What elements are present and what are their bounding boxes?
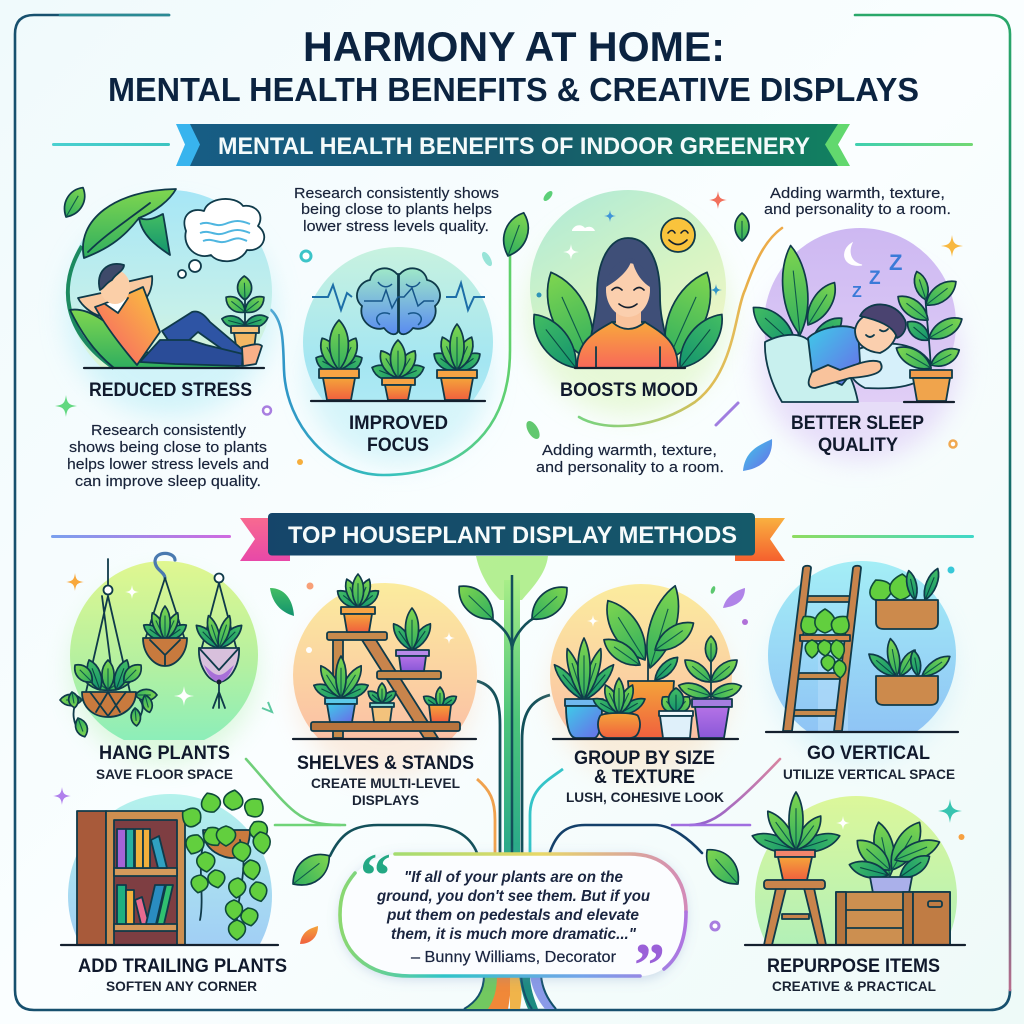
panel: add trailing plants: [60, 789, 280, 946]
text: reduced stress description: [67, 423, 269, 490]
icon: big leaf and lounger: [68, 189, 240, 368]
icon: three potted plants: [313, 320, 484, 400]
text: better sleep description: and personality to a room.: [764, 202, 951, 218]
label: group by size and texture: LUSH, COHESIVE LOOK: [566, 790, 724, 805]
icon: ladder: [783, 566, 861, 731]
label: add trailing plants: ADD TRAILING PLANTS: [78, 956, 287, 977]
label: repurpose items: REPURPOSE ITEMS: [767, 956, 940, 977]
label: group by size and texture: & TEXTURE: [594, 767, 695, 788]
icon: cloud and sparkles: [536, 191, 727, 298]
text: reduced stress description: Research consistently: [91, 423, 247, 439]
text: reduced stress description: shows being close to plants: [69, 440, 267, 456]
title: HARMONY AT HOME:: [303, 23, 725, 70]
icon: hook basket: [141, 553, 189, 666]
icon: smiley: [661, 218, 695, 252]
text: focus description: being close to plants helps: [301, 202, 492, 218]
label: repurpose items: CREATIVE & PRACTICAL: [772, 979, 936, 994]
label: better sleep quality: QUALITY: [818, 435, 898, 456]
icon: potted plant: [220, 276, 270, 358]
icon: sleeping man: [765, 304, 930, 402]
icon: stool plant: [750, 792, 842, 880]
icon: side foliage: [524, 265, 732, 376]
panel: shelves and stands: [293, 574, 477, 778]
icon: opening quote mark: “: [360, 842, 391, 910]
text: zzz: [852, 250, 902, 301]
icon: wall planters: [865, 567, 953, 705]
panel: reduced stress: [66, 189, 274, 416]
label: group by size and texture: GROUP BY SIZE: [574, 748, 715, 769]
central tree: [451, 556, 574, 862]
sparkles: [306, 632, 455, 653]
icon: hanging fern on ladder: [796, 609, 854, 678]
decorations: purple leaf and dots: [710, 586, 748, 625]
sparkles: [125, 585, 194, 706]
text: boosts mood description: Adding warmth, texture,: [542, 443, 717, 459]
label: boosts mood: BOOSTS MOOD: [560, 380, 698, 401]
text: focus description: [294, 186, 499, 235]
icon: stool: [764, 880, 826, 945]
label: shelves and stands: DISPLAYS: [352, 793, 419, 808]
icon: thought cloud: [178, 199, 264, 278]
icon: wooden crate: [836, 892, 950, 945]
panel: better sleep: [746, 228, 966, 460]
label: group by size and texture: [566, 748, 724, 805]
icon: right plant and pot: [892, 270, 966, 401]
connector: mood to sleep: [579, 228, 782, 426]
icon: crate plant: [847, 817, 943, 893]
connectors: left methods: [246, 759, 477, 894]
text: boosts mood description: [536, 443, 724, 476]
label: hang plants: SAVE FLOOR SPACE: [96, 767, 233, 782]
label: improved focus: [349, 413, 448, 456]
banner: top houseplant display methods: [51, 513, 974, 561]
text: quote body: [376, 869, 651, 943]
text: zzz: Z: [869, 268, 881, 289]
icon: large hanging basket: [60, 559, 157, 739]
label: shelves and stands: [297, 753, 474, 808]
decorations: small leaf and dot: [262, 582, 314, 712]
label: better sleep quality: BETTER SLEEP: [791, 413, 924, 434]
label: hang plants: HANG PLANTS: [99, 743, 230, 764]
icon: books: [117, 829, 173, 924]
icon: left plant: [746, 244, 847, 353]
banner: mental health benefits: [52, 124, 973, 166]
icon: smiling woman: [577, 238, 678, 368]
label: improved focus: IMPROVED: [349, 413, 448, 434]
icon: wooden stand: [311, 632, 460, 738]
panel: boosts mood: [524, 190, 732, 415]
text: reduced stress description: helps lower stress levels and: [67, 457, 269, 473]
title: MENTAL HEALTH BENEFITS & CREATIVE DISPLAYS: [108, 71, 919, 108]
label: hang plants: [96, 743, 233, 782]
text: quote body: "If all of your plants are on the: [404, 869, 623, 886]
text: quote body: put them on pedestals and elevate: [386, 907, 639, 924]
decorations: purple star and leaf: [53, 787, 318, 944]
text: focus description: lower stress levels quality.: [303, 219, 489, 235]
label: add trailing plants: [78, 956, 287, 994]
label: reduced stress: REDUCED STRESS: [89, 380, 252, 401]
text: focus description: Research consistently shows: [294, 186, 499, 202]
icon: brain: [357, 268, 440, 334]
decorative leaves and dots top: [55, 183, 772, 471]
panel: group by size and texture: [550, 582, 743, 778]
panel: go vertical: [766, 561, 958, 760]
text: boosts mood description: and personality to a room.: [536, 460, 724, 476]
icon: bookcase: [77, 811, 185, 945]
label: shelves and stands: CREATE MULTI-LEVEL: [311, 776, 460, 791]
text: quote body: them, it is much more dramatic...": [391, 926, 637, 943]
icon: grouped plants: [550, 582, 743, 738]
panel: hang plants: [60, 553, 258, 762]
text: zzz: Z: [852, 284, 862, 301]
label: repurpose items: [767, 956, 940, 994]
label: go vertical: [783, 743, 955, 782]
decorations: [941, 235, 963, 448]
label: go vertical: UTILIZE VERTICAL SPACE: [783, 767, 955, 782]
text: zzz: Z: [889, 250, 902, 275]
label: shelves and stands: SHELVES & STANDS: [297, 753, 474, 774]
text: better sleep description: [764, 186, 951, 218]
icon: reclining person: [78, 264, 262, 366]
text: attribution: – Bunny Williams, Decorator: [411, 949, 616, 966]
title: [108, 23, 919, 108]
text: quote body: ground, you don't see them. But if you: [376, 888, 651, 905]
connector: stress to focus to mood: [271, 245, 510, 475]
icon: moon: [845, 243, 862, 265]
banner: top houseplant display methods: TOP HOUSEPLANT DISPLAY METHODS: [288, 522, 737, 549]
icon: closing quote mark: ”: [634, 932, 665, 1000]
banner: mental health benefits: MENTAL HEALTH BENEFITS OF INDOOR GREENERY: [218, 133, 810, 160]
icon: macrame basket: [193, 574, 245, 708]
decorations: orange star: [66, 573, 84, 591]
panel: improved focus: [303, 247, 493, 464]
icon: pulse lines: [312, 283, 485, 310]
text: better sleep description: Adding warmth, texture,: [770, 186, 945, 202]
callout: quote: [340, 842, 686, 1000]
label: improved focus: FOCUS: [367, 435, 429, 456]
text: reduced stress description: can improve sleep quality.: [75, 474, 261, 490]
label: go vertical: GO VERTICAL: [807, 743, 930, 764]
connectors: right methods: [550, 759, 780, 892]
label: add trailing plants: SOFTEN ANY CORNER: [106, 979, 257, 994]
decorations: teal star and dot: [938, 799, 964, 840]
label: better sleep quality: [791, 413, 924, 456]
decoration: purple ring: [711, 922, 719, 930]
roots: [464, 975, 556, 1009]
icon: trailing pothos: [178, 789, 272, 940]
icon: shelf plants: [311, 574, 459, 722]
icon: connector leaf: [497, 209, 534, 260]
panel: repurpose items: [744, 791, 966, 946]
